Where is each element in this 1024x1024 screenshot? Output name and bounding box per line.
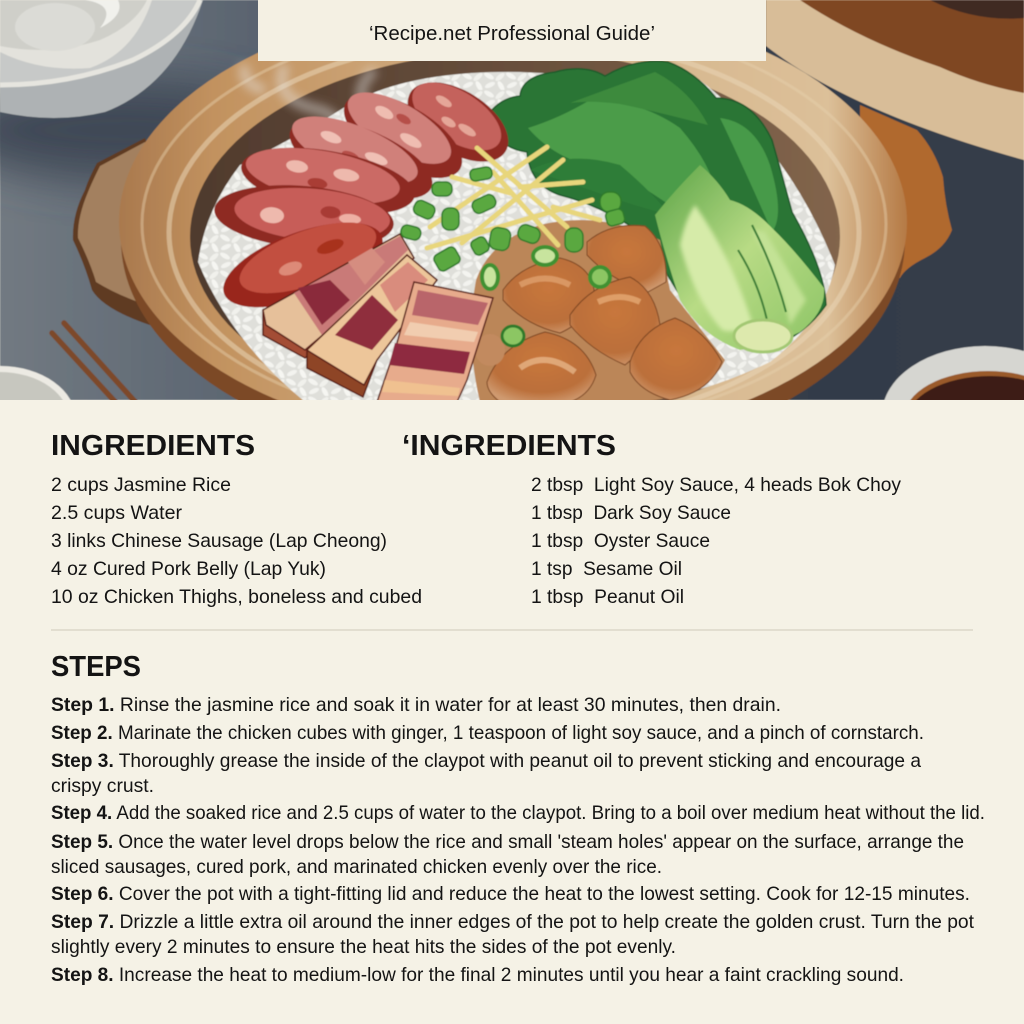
sausage slice: [222, 222, 384, 308]
ingredient list: right column: 1 tsp Sesame Oil: [531, 558, 682, 580]
icon: small bowl: [0, 366, 76, 474]
ingredient list: left column: 4 oz Cured Pork Belly (Lap Yuk): [51, 558, 326, 580]
panel: ingredients: [51, 430, 901, 608]
ingredient list: right column: 2 tbsp Light Soy Sauce, 4 heads Bok Choy: [531, 474, 901, 496]
heading: ingredients left: INGREDIENTS: [51, 430, 255, 462]
step 3: crispy crust.: [51, 775, 154, 797]
sausage slice: [240, 146, 414, 213]
step 4: Step 4. Add the soaked rice and 2.5 cups of water to the claypot. Bring to a boil over medium heat without the lid.: [51, 802, 985, 824]
step 7: slightly every 2 minutes to ensure the heat hits the sides of the pot evenly.: [51, 936, 676, 958]
table surface: [0, 0, 1024, 400]
sausage slice: [289, 116, 434, 198]
sausage slice: [214, 184, 394, 244]
icon: claypot handles: [73, 105, 952, 330]
chicken: [471, 220, 725, 402]
step 7: Step 7. Drizzle a little extra oil around the inner edges of the pot to help create the golden crust. Turn the pot: [51, 911, 975, 933]
step 1: Step 1. Rinse the jasmine rice and soak it in water for at least 30 minutes, then drain.: [51, 694, 781, 716]
step 3: Step 3. Thoroughly grease the inside of the claypot with peanut oil to prevent sticking and encourage a: [51, 750, 921, 772]
panel: steps: [51, 651, 985, 986]
ingredient list: left column: 2 cups Jasmine Rice: [51, 474, 231, 496]
bok choy: [488, 61, 826, 352]
pork slab: [377, 282, 493, 402]
chicken piece: [503, 258, 594, 333]
ingredient list: left column: 3 links Chinese Sausage (Lap Cheong): [51, 530, 387, 552]
step 5: sliced sausages, cured pork, and marinated chicken evenly over the rice.: [51, 856, 662, 878]
heading: ingredients right: ‘INGREDIENTS: [402, 430, 616, 462]
banner title: ‘Recipe.net Professional Guide’: [369, 23, 655, 45]
pork slab: [307, 255, 437, 397]
icon: sauce dish: [884, 345, 1024, 400]
step 6: Step 6. Cover the pot with a tight-fitting lid and reduce the heat to the lowest setting. Cook for 12-15 minutes.: [51, 883, 970, 905]
pork slab: [263, 234, 414, 358]
sausage slice: [407, 82, 509, 162]
step 7: [51, 911, 975, 958]
step 3: [51, 750, 921, 797]
heading: steps: STEPS: [51, 651, 141, 683]
bok choy stem: [655, 165, 824, 350]
scallions: [400, 166, 626, 346]
ingredient list: right column: [531, 474, 901, 608]
lap cheong sausage slices: [214, 82, 509, 308]
cured pork belly: [263, 234, 493, 402]
icon: claypot lid: [766, 0, 1024, 160]
icon: chopsticks: [52, 323, 138, 405]
step 2: Step 2. Marinate the chicken cubes with ginger, 1 teaspoon of light soy sauce, and a pinch of cornstarch.: [51, 722, 924, 744]
step 5: Step 5. Once the water level drops below the rice and small 'steam holes' appear on the surface, arrange the: [51, 831, 964, 853]
ingredient list: right column: 1 tbsp Oyster Sauce: [531, 530, 710, 552]
bok choy base: [734, 320, 792, 352]
step 5: [51, 831, 964, 878]
hero illustration: claypot rice: [0, 0, 1024, 400]
step 8: Step 8. Increase the heat to medium-low for the final 2 minutes until you hear a faint crackling sound.: [51, 964, 904, 986]
rice: [198, 72, 835, 402]
icon: stacked bowls: [0, 0, 203, 118]
ingredient list: right column: 1 tbsp Peanut Oil: [531, 586, 684, 608]
sausage slice: [343, 92, 463, 179]
chicken piece: [587, 225, 666, 292]
ingredient list: right column: 1 tbsp Dark Soy Sauce: [531, 502, 731, 524]
ingredient list: left column: [51, 474, 422, 608]
chicken piece: [630, 318, 722, 400]
ingredient list: left column: 10 oz Chicken Thighs, boneless and cubed: [51, 586, 422, 608]
steam: [234, 60, 382, 118]
claypot rim: [119, 51, 908, 400]
chicken piece: [570, 277, 660, 365]
ingredient list: left column: 2.5 cups Water: [51, 502, 183, 524]
header banner: [258, 0, 766, 61]
ginger shreds: [427, 147, 600, 248]
chicken piece: [487, 332, 596, 402]
bok choy leaves: [488, 61, 826, 348]
